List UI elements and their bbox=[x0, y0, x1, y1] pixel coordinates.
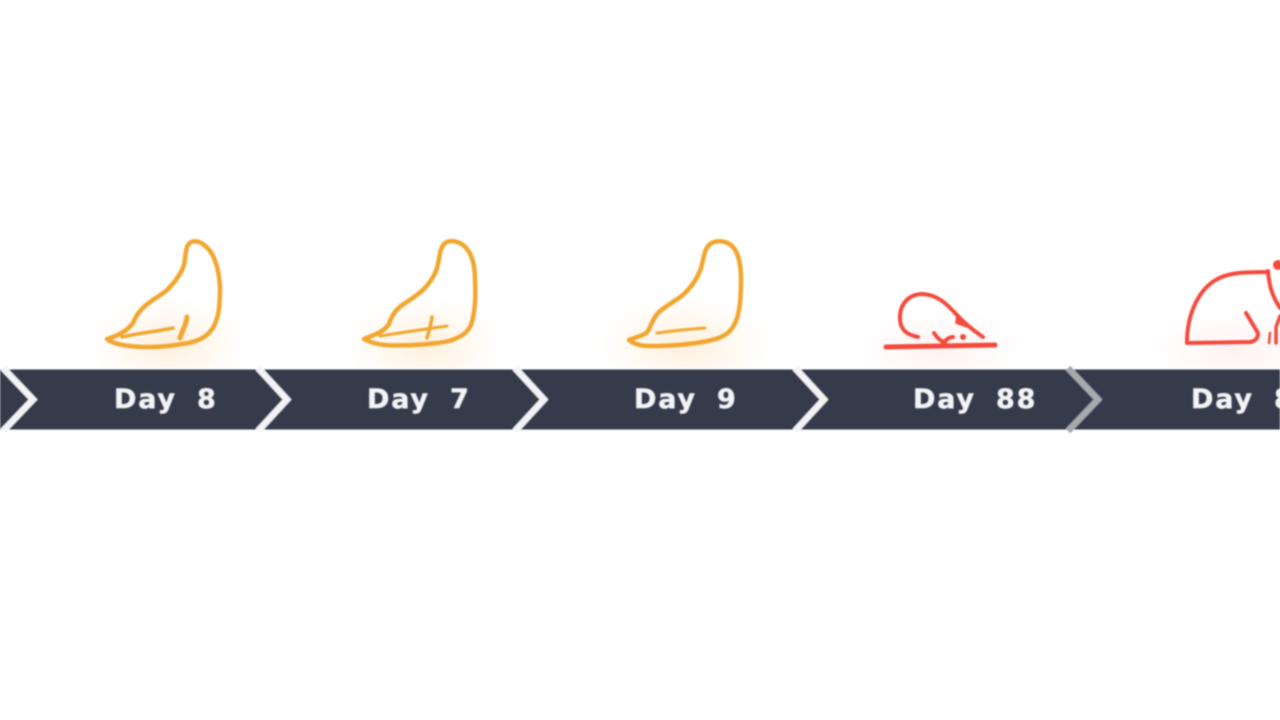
label: Day 88: Day 88 bbox=[913, 384, 1037, 415]
label: Day 7: Day 7 bbox=[367, 384, 471, 415]
chevron separator 5 bbox=[1068, 368, 1098, 431]
icon: orange seal day 7 bbox=[360, 238, 482, 368]
chevron separator 3 bbox=[515, 368, 544, 431]
chevron separator 2 bbox=[258, 368, 287, 431]
label: Day 9: Day 9 bbox=[634, 384, 738, 415]
chevron separator 4 bbox=[795, 368, 824, 431]
icon: orange seal day 9 bbox=[622, 238, 748, 368]
icon: red animal crouching bbox=[882, 290, 999, 364]
icon: red animal standing clipped bbox=[1184, 259, 1280, 365]
timeline arrow band bbox=[0, 368, 1280, 431]
icon: orange seal day 8 bbox=[104, 238, 225, 368]
label: Day 8: Day 8 bbox=[114, 384, 218, 415]
chevron separator 1 bbox=[3, 368, 33, 431]
